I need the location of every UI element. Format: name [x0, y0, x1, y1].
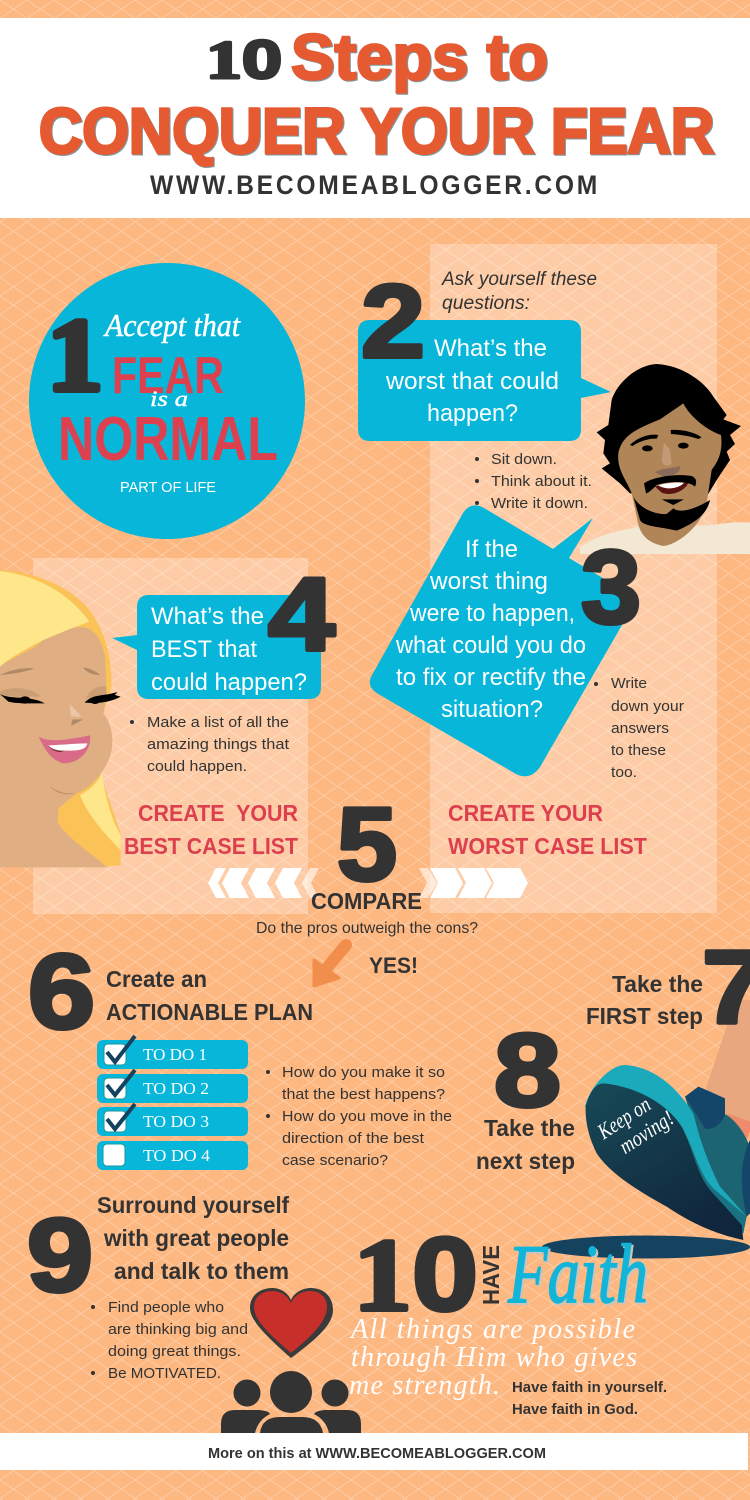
accept that: Accept that — [103, 307, 241, 343]
step 2 bullet list: Write it down. — [491, 495, 588, 512]
to do checklist: TO DO 1 — [143, 1045, 207, 1064]
normal: NORMAL — [58, 405, 278, 474]
step 3 bullet list: down your — [611, 698, 684, 715]
speech bubble step 4: BEST that — [151, 636, 257, 663]
chevrons pointing right — [419, 868, 528, 898]
website url: WWW.BECOMEABLOGGER.COM — [150, 170, 600, 200]
speech bubble step 3 — [370, 505, 634, 776]
footer band — [0, 1433, 748, 1470]
heading: worst case list — [448, 800, 647, 859]
icon: group of people — [221, 1371, 361, 1433]
part of life: PART OF LIFE — [120, 480, 216, 496]
step 2 bullet list: Sit down. — [491, 451, 557, 468]
arrow — [326, 945, 346, 969]
faith script: Faith — [507, 1228, 648, 1321]
keep on moving — [592, 1085, 678, 1165]
number 3: 3 — [581, 530, 641, 646]
number 8: 8 — [494, 1013, 561, 1129]
title: Conquer your fear: CONQUER YOUR FEAR — [39, 95, 714, 167]
title: Steps to: Steps to — [291, 21, 548, 93]
step 7 label: Take the — [612, 971, 703, 997]
step 3 bullet list: to these — [611, 742, 666, 759]
number 10: 10 — [353, 1217, 478, 1333]
number 9: 9 — [27, 1198, 93, 1314]
heading: actionable plan: Create an — [106, 966, 207, 992]
number 1: 1 — [47, 298, 103, 413]
step 9 bullet list: doing great things. — [108, 1343, 241, 1360]
speech bubble step 3: worst thing — [429, 568, 548, 595]
step 3 bullet list: too. — [611, 764, 637, 781]
to do checklist: TO DO 4 — [143, 1146, 211, 1165]
step 4 bullet list: Make a list of all the — [147, 714, 289, 731]
step 9 bullet list: Be MOTIVATED. — [108, 1365, 221, 1382]
speech bubble step 3: were to happen, — [409, 600, 575, 627]
have faith text: Have faith in God. — [512, 1402, 638, 1418]
step 4 bullet list: could happen. — [147, 758, 247, 775]
speech bubble step 4: What’s the — [151, 603, 264, 630]
step 6 bullet list: How do you move in the — [282, 1108, 452, 1125]
intro text: ask yourself: Ask yourself these — [441, 269, 597, 290]
footer band: More on this at WWW.BECOMEABLOGGER.COM — [208, 1445, 546, 1462]
have faith text: Have faith in yourself. — [512, 1380, 667, 1396]
speech bubble step 2 — [358, 320, 611, 441]
panel: best case column — [33, 558, 308, 914]
speech bubble step 4: could happen? — [151, 669, 307, 696]
intro text: ask yourself: questions: — [442, 293, 530, 314]
step 6 bullet list: case scenario? — [282, 1152, 388, 1169]
step 1 circle — [29, 263, 305, 539]
heading: worst case list: CREATE YOUR — [448, 800, 603, 826]
icon: heart — [250, 1288, 333, 1358]
is a: is a — [150, 386, 188, 411]
intro text: ask yourself — [441, 269, 597, 314]
have (vertical): HAVE — [478, 1245, 504, 1305]
heading: best case list: CREATE YOUR — [138, 800, 298, 826]
quote: through Him who gives — [351, 1342, 637, 1373]
step 9 heading: with great people — [103, 1225, 289, 1251]
heading: best case list — [124, 800, 298, 859]
speech bubble step 3: If the — [465, 536, 518, 563]
step 9 heading: Surround yourself — [97, 1192, 289, 1218]
quote — [349, 1314, 637, 1401]
step 6 bullet list: direction of the best — [282, 1130, 425, 1147]
to do checklist: TO DO 3 — [143, 1112, 209, 1131]
header band with title — [0, 18, 750, 218]
step 7 label — [586, 971, 703, 1029]
step 5: compare: COMPARE — [311, 888, 422, 914]
panel: worst case column — [430, 244, 717, 913]
step 6 bullet list: that the best happens? — [282, 1086, 445, 1103]
yes: YES! — [369, 953, 418, 978]
fear: FEAR — [112, 347, 224, 405]
step 9 bullet list: are thinking big and — [108, 1321, 248, 1338]
illustration: woman — [0, 570, 121, 867]
chevrons pointing left — [208, 868, 319, 898]
heading: actionable plan — [106, 966, 313, 1025]
step 6 bullet list: How do you make it so — [282, 1064, 445, 1081]
have faith text — [512, 1380, 667, 1418]
step 9 bullet list — [91, 1299, 248, 1382]
speech bubble step 2: happen? — [427, 400, 518, 427]
step 8 label — [476, 1115, 575, 1174]
keep on moving: Keep on — [592, 1091, 655, 1144]
step 9 bullet list: Find people who — [108, 1299, 224, 1316]
to do checklist — [97, 1036, 248, 1170]
keep on moving: moving! — [614, 1105, 678, 1159]
step 2 bullet list — [475, 451, 592, 512]
heading: best case list: BEST CASE LIST — [124, 833, 298, 859]
number 6: 6 — [28, 933, 95, 1051]
step 2 bullet list: Think about it. — [491, 473, 592, 490]
step 4 bullet list: amazing things that — [147, 736, 290, 753]
speech bubble step 4 — [112, 595, 321, 699]
step 5: compare: Do the pros outweigh the cons? — [256, 920, 478, 937]
quote: All things are possible — [349, 1314, 635, 1345]
step 9 heading — [97, 1192, 289, 1284]
step 8 label: Take the — [484, 1115, 575, 1141]
ground shadow — [542, 1236, 750, 1258]
step 3 bullet list — [594, 675, 684, 781]
step 5: compare — [256, 888, 478, 937]
heading: actionable plan: ACTIONABLE PLAN — [106, 999, 313, 1025]
step 3 bullet list: answers — [611, 720, 669, 737]
step 4 bullet list — [130, 714, 290, 775]
quote: me strength. — [349, 1370, 500, 1401]
step 8 label: next step — [476, 1148, 575, 1174]
speech bubble step 2: worst that could — [385, 368, 559, 395]
heading: worst case list: WORST CASE LIST — [448, 833, 647, 859]
number 4: 4 — [268, 557, 335, 673]
step 9 heading: and talk to them — [114, 1258, 289, 1284]
speech bubble step 3: situation? — [441, 696, 543, 723]
step 6 bullet list — [266, 1064, 452, 1169]
number 2: 2 — [361, 264, 425, 380]
speech bubble step 2: What’s the — [434, 335, 547, 362]
title: 10: 10 — [206, 30, 282, 90]
speech bubble step 3: to fix or rectify the — [396, 664, 586, 691]
illustration: shoe — [542, 1000, 750, 1258]
to do checklist: TO DO 2 — [143, 1079, 209, 1098]
illustration: man — [580, 364, 750, 554]
step 7 label: FIRST step — [586, 1003, 703, 1029]
speech bubble step 3: what could you do — [395, 632, 586, 659]
number 5: 5 — [337, 787, 397, 903]
step 3 bullet list: Write — [611, 675, 647, 692]
